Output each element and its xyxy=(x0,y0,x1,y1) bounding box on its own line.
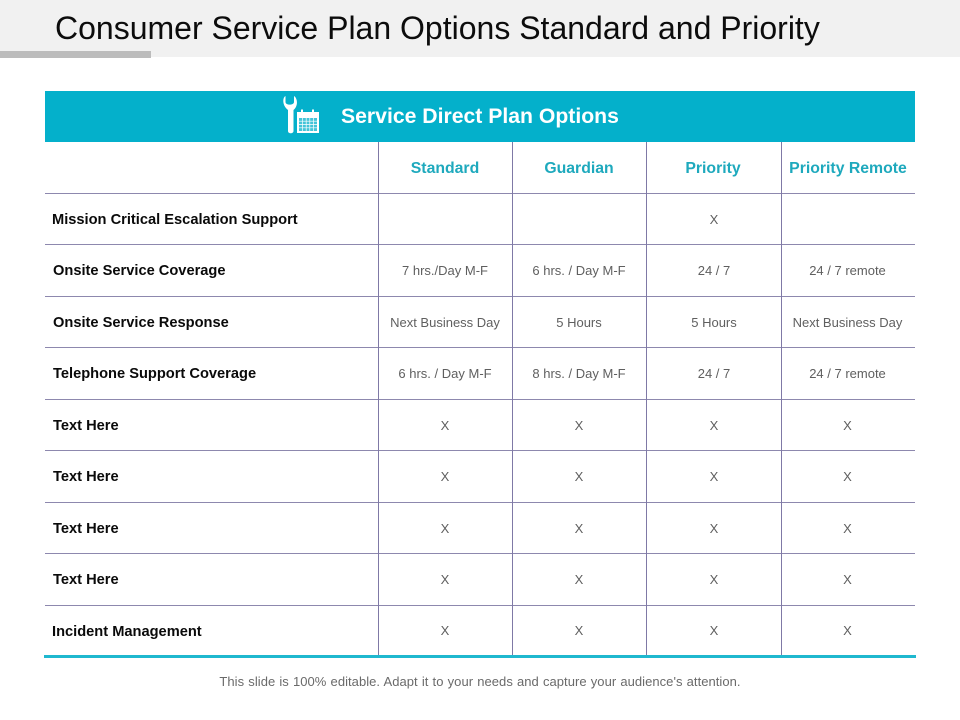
row: Mission Critical Escalation Support: Mission Critical Escalation Support xyxy=(52,212,298,228)
row: Text Here 3: X xyxy=(575,521,583,536)
title band xyxy=(0,0,960,57)
row: Text Here 2: X xyxy=(575,469,583,484)
row: Incident Management: X xyxy=(843,623,852,638)
row: Text Here 4: X xyxy=(575,572,583,587)
row: Mission Critical Escalation Support xyxy=(52,212,718,228)
row: Text Here 4: Text Here xyxy=(53,572,119,588)
row: Text Here 1: Text Here xyxy=(53,418,119,434)
row: Text Here 3 xyxy=(53,521,852,537)
row: Text Here 2: X xyxy=(710,469,718,484)
title: Consumer Service Plan Options Standard and Priority xyxy=(55,10,820,46)
row: Incident Management xyxy=(52,623,852,640)
table header band xyxy=(45,91,915,142)
table bottom rule xyxy=(44,655,916,658)
row: Onsite Service Coverage xyxy=(53,263,886,279)
row: Text Here 2 xyxy=(53,469,852,485)
row: Telephone Support Coverage: Telephone Support Coverage xyxy=(53,366,256,382)
row: Telephone Support Coverage: 8 hrs. / Day M-F xyxy=(532,366,626,381)
column headers: Priority xyxy=(685,160,741,177)
row: Text Here 1 xyxy=(53,418,852,434)
row: Onsite Service Coverage: 24 / 7 remote xyxy=(809,263,886,278)
row: Onsite Service Coverage: 7 hrs./Day M-F xyxy=(402,263,488,278)
row: Text Here 2: Text Here xyxy=(53,469,119,485)
row: Onsite Service Coverage: 6 hrs. / Day M-F xyxy=(532,263,626,278)
row: Telephone Support Coverage: 24 / 7 xyxy=(698,366,730,381)
row: Telephone Support Coverage xyxy=(53,366,886,382)
row: Text Here 2: X xyxy=(843,469,852,484)
column headers: Standard xyxy=(411,160,479,177)
column headers xyxy=(411,160,907,177)
row: Incident Management: X xyxy=(441,623,449,638)
row: Text Here 1: X xyxy=(441,418,449,433)
row: Text Here 1: X xyxy=(575,418,583,433)
row: Incident Management: Incident Management xyxy=(52,624,202,640)
row: Text Here 2: X xyxy=(441,469,449,484)
row: Onsite Service Response xyxy=(53,315,902,331)
row: Text Here 3: X xyxy=(843,521,852,536)
row: Onsite Service Response: Onsite Service Response xyxy=(53,315,229,331)
row: Text Here 1: X xyxy=(710,418,718,433)
row: Text Here 3: X xyxy=(441,521,449,536)
row: Onsite Service Response: Next Business Day xyxy=(793,315,902,330)
row: Telephone Support Coverage: 6 hrs. / Day M-F xyxy=(398,366,492,381)
row: Text Here 1: X xyxy=(843,418,852,433)
row: Text Here 4: X xyxy=(843,572,852,587)
table heading: Service Direct Plan Options xyxy=(341,105,619,128)
row: Incident Management: X xyxy=(575,623,583,638)
icon: wrench and calendar xyxy=(283,96,319,134)
column headers: Priority Remote xyxy=(789,160,907,177)
row: Onsite Service Response: 5 Hours xyxy=(691,315,737,330)
row: Mission Critical Escalation Support: X xyxy=(710,212,718,227)
title accent bar xyxy=(0,51,151,58)
row: Onsite Service Response: Next Business Day xyxy=(390,315,500,330)
row: Text Here 3: Text Here xyxy=(53,521,119,537)
footer note: This slide is 100% editable. Adapt it to your needs and capture your audience's attention. xyxy=(219,674,741,689)
row: Text Here 3: X xyxy=(710,521,718,536)
row: Onsite Service Response: 5 Hours xyxy=(556,315,602,330)
row: Incident Management: X xyxy=(710,623,718,638)
row: Text Here 4: X xyxy=(441,572,449,587)
row: Text Here 4 xyxy=(53,572,852,588)
column headers: Guardian xyxy=(544,160,614,177)
row: Onsite Service Coverage: 24 / 7 xyxy=(698,263,730,278)
row: Onsite Service Coverage: Onsite Service Coverage xyxy=(53,263,226,279)
row: Text Here 4: X xyxy=(710,572,718,587)
row: Telephone Support Coverage: 24 / 7 remote xyxy=(809,366,886,381)
